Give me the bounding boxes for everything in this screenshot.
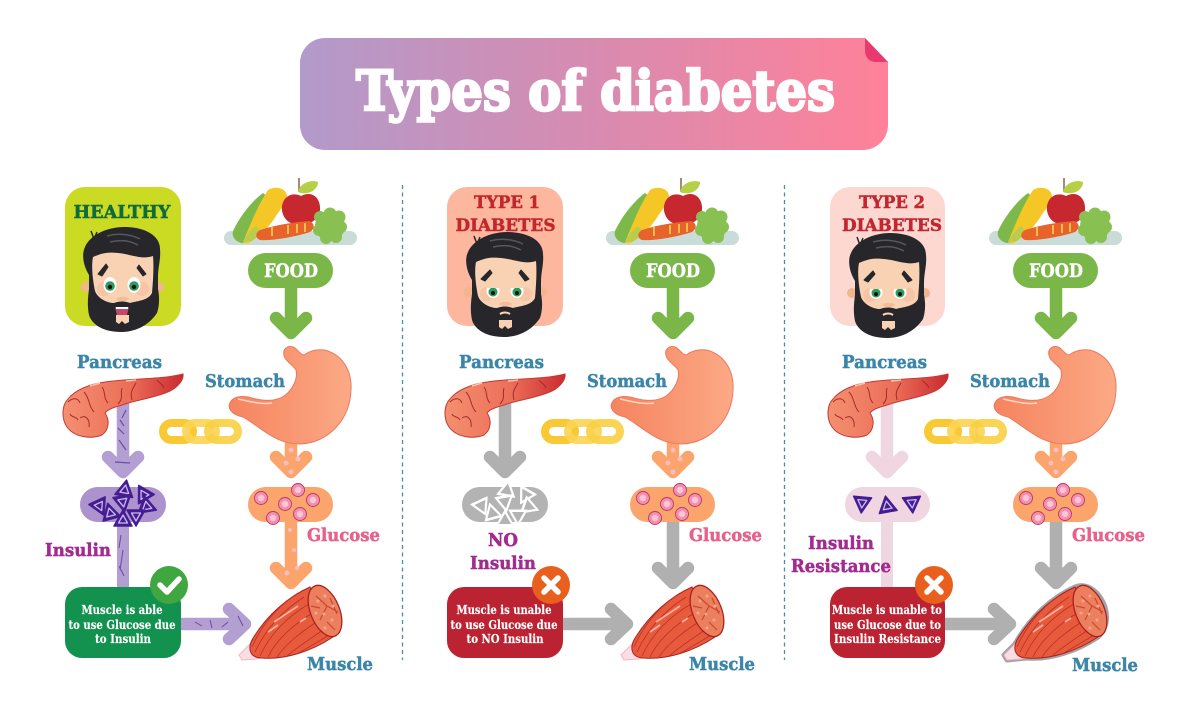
panel: type 1 diabetes: [445, 178, 762, 675]
icon: cross: [915, 566, 953, 604]
icon: stomach: [229, 347, 351, 444]
icon: muscle with grey outline: [1004, 581, 1114, 660]
result box: unable: Insulin Resistance: [834, 632, 941, 646]
empty insulin pill: [462, 479, 548, 526]
icon: food: [224, 178, 357, 245]
icon: folded corner: [865, 38, 888, 62]
reduced insulin pill: [845, 487, 930, 522]
label: insulin resistance: [791, 533, 891, 577]
card: type 2 patient: [830, 187, 945, 338]
icon: chain: [928, 423, 1003, 440]
label: glucose: Glucose: [1072, 525, 1145, 546]
result box: able: to use Glucose due: [68, 618, 176, 632]
heading: diabetes: DIABETES: [842, 216, 942, 236]
icon: pancreas: [63, 374, 183, 437]
label: pancreas: Pancreas: [842, 352, 927, 373]
icon: happy face: [81, 227, 164, 332]
label: stomach: Stomach: [205, 371, 285, 392]
arrow: food to stomach: [276, 288, 306, 333]
arrow: food to stomach: [1041, 288, 1071, 333]
icon: chain: [163, 423, 238, 440]
label: glucose: Glucose: [689, 525, 762, 546]
glucose pill: [248, 484, 333, 524]
panel: type 2 diabetes: [791, 178, 1145, 676]
label: no insulin: [470, 530, 536, 574]
label: insulin resistance: Resistance: [791, 556, 891, 577]
heading: healthy: HEALTHY: [74, 202, 172, 223]
arrow: stomach to glucose: [658, 440, 688, 474]
card: healthy patient: [65, 187, 181, 332]
arrow: glucose to muscle: [658, 522, 688, 583]
arrow: box to muscle: [175, 609, 245, 639]
icon: pancreas: [445, 374, 565, 437]
arrow: stomach to glucose: [276, 440, 306, 474]
arrow: glucose to muscle: [1041, 522, 1071, 583]
icon: stomach: [994, 347, 1116, 444]
heading: diabetes: DIABETES: [456, 216, 556, 236]
title text: Types of diabetes: [356, 58, 835, 123]
result box: able: [65, 587, 181, 658]
label: glucose: Glucose: [307, 525, 380, 546]
heading: type 1: TYPE 1: [474, 193, 540, 213]
label: muscle: Muscle: [1072, 655, 1138, 676]
title banner: [300, 38, 888, 150]
food pill: FOOD: [264, 260, 318, 282]
result box: unable: use Glucose due to: [834, 618, 941, 632]
arrow: reduced insulin to box: [881, 520, 893, 590]
icon: check mark: [150, 566, 188, 604]
arrow: box to muscle: [939, 609, 1010, 639]
result box: unable: [830, 587, 945, 658]
icon: stomach: [611, 347, 733, 444]
arrow: pancreas to pill: [872, 403, 902, 472]
food pill: [630, 253, 715, 288]
card: type 1 patient: [447, 187, 563, 337]
icon: muscle: [239, 581, 349, 660]
result box: unable: to NO Insulin: [466, 632, 544, 646]
food pill: [1013, 253, 1098, 288]
arrow: pancreas to pill: [490, 403, 520, 472]
icon: sad face: [464, 232, 547, 337]
label: muscle: Muscle: [307, 654, 373, 675]
icon: muscle: [621, 581, 731, 660]
result box: able: Muscle is able: [82, 603, 163, 617]
result box: unable: Muscle is unable to: [832, 603, 942, 617]
heading: type 2: TYPE 2: [859, 193, 925, 213]
label: insulin resistance: Insulin: [808, 533, 874, 554]
icon: food: [606, 178, 739, 245]
result box: able: to Insulin: [95, 632, 151, 646]
arrow: stomach to glucose: [1041, 440, 1071, 474]
icon: chain: [545, 423, 620, 440]
arrow: food to stomach: [658, 288, 688, 333]
arrow: glucose to muscle: [276, 522, 306, 583]
glucose pill: [1013, 484, 1098, 524]
arrow: pancreas to insulin: [108, 403, 138, 472]
icon: food: [989, 178, 1122, 245]
food pill: FOOD: [646, 260, 700, 282]
result box: unable: to use Glucose due: [450, 618, 558, 632]
label: insulin: Insulin: [45, 540, 111, 561]
arrow: insulin to box: [117, 520, 129, 590]
food pill: [248, 253, 333, 288]
label: pancreas: Pancreas: [77, 352, 162, 373]
label: stomach: Stomach: [970, 371, 1050, 392]
food pill: FOOD: [1029, 260, 1083, 282]
label: muscle: Muscle: [689, 654, 755, 675]
glucose pill: [630, 484, 715, 524]
icon: pancreas: [828, 374, 948, 437]
insulin pill: [80, 479, 166, 526]
panel: healthy: [45, 178, 380, 675]
icon: sad face: [847, 233, 930, 338]
label: no insulin: Insulin: [470, 553, 536, 574]
label: no insulin: NO: [488, 530, 518, 551]
result box: unable: [447, 587, 563, 658]
result box: unable: Muscle is unable: [456, 603, 552, 617]
arrow: box to muscle: [556, 609, 627, 639]
label: stomach: Stomach: [587, 371, 667, 392]
label: pancreas: Pancreas: [459, 352, 544, 373]
icon: cross: [532, 566, 570, 604]
